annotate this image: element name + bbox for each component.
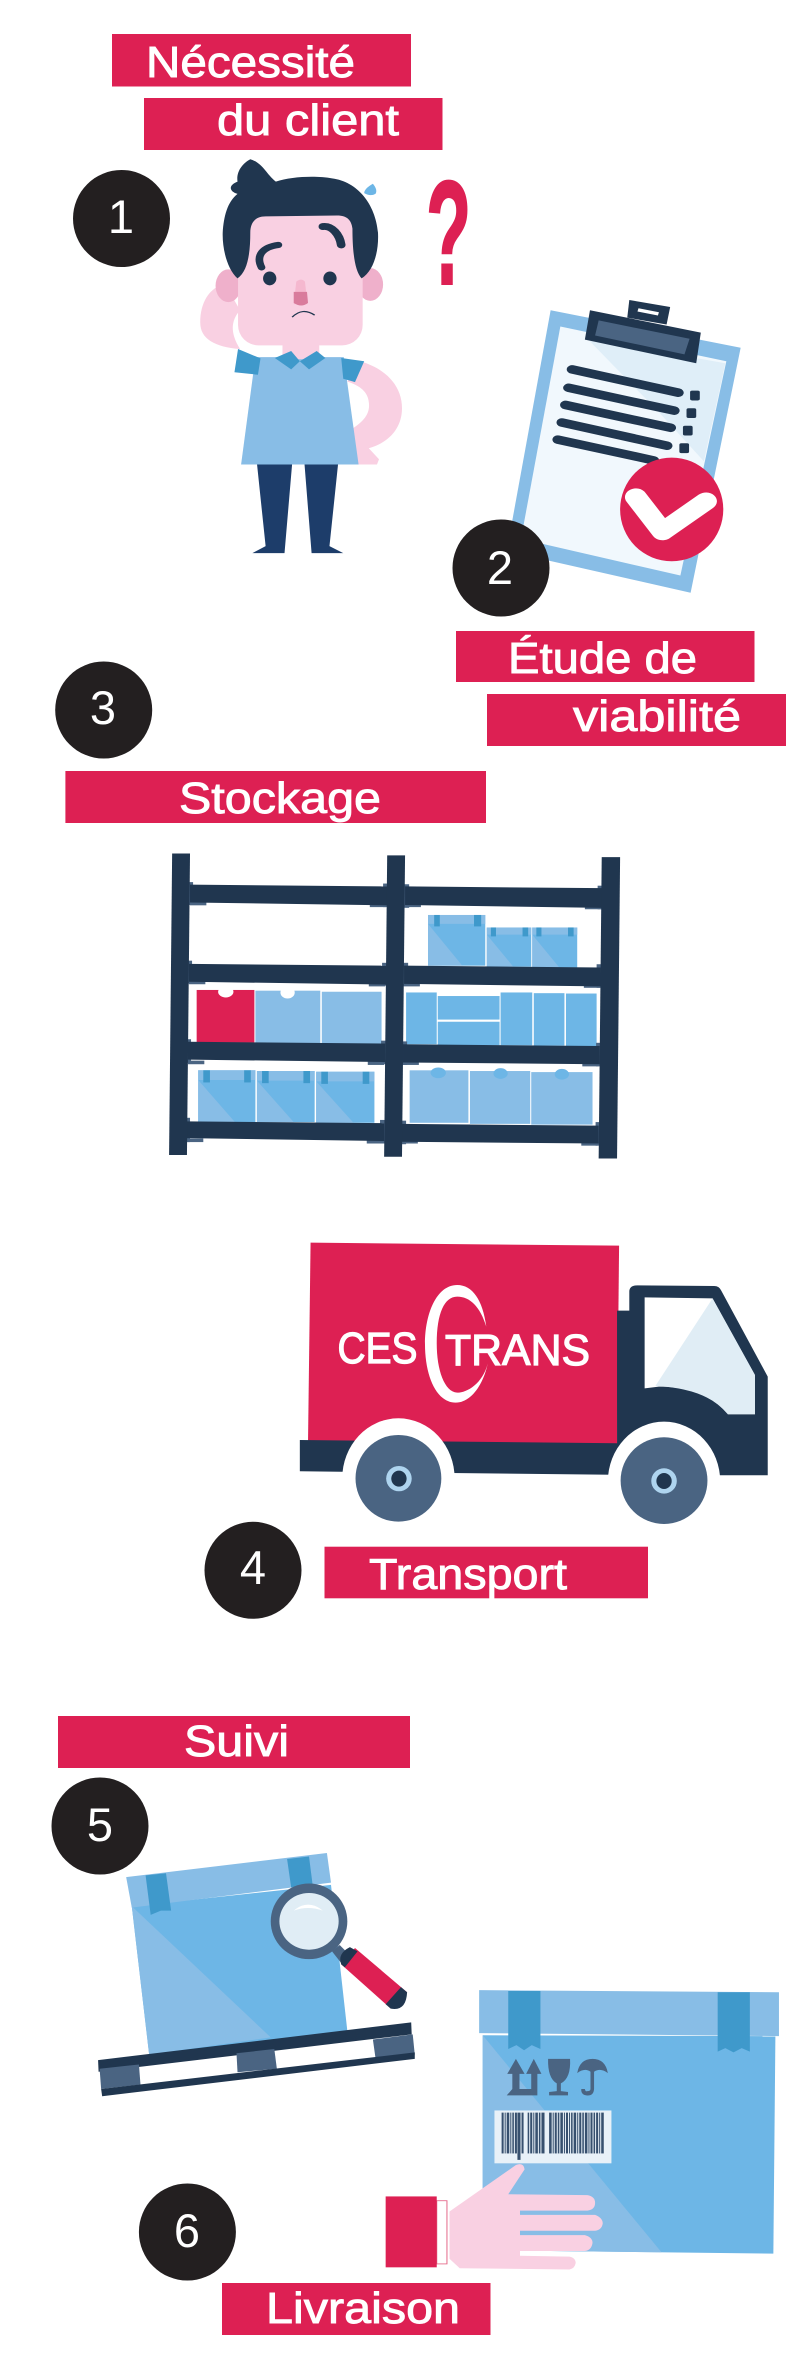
icon: delivery truck with logo: TRANS bbox=[445, 1326, 590, 1375]
icon: barcode label bbox=[494, 2110, 611, 2163]
number badge 6: 6 bbox=[174, 2204, 200, 2257]
heading: Stockage: Stockage bbox=[179, 774, 381, 823]
heading: Nécessité du client: Nécessité bbox=[146, 38, 355, 87]
panel: step 5 tracking bbox=[52, 1716, 415, 2096]
heading: Étude de viabilité: Étude de bbox=[508, 634, 697, 683]
panel: step 3 storage bbox=[55, 662, 620, 1159]
number badge 6 bbox=[139, 2184, 236, 2280]
heading: Nécessité du client: du client bbox=[217, 96, 399, 145]
heading: Livraison: Livraison bbox=[266, 2284, 460, 2333]
number badge 1: 1 bbox=[108, 190, 134, 243]
heading: Transport: Transport bbox=[369, 1550, 567, 1599]
number badge 5 bbox=[52, 1778, 148, 1874]
heading: Étude de viabilité bbox=[456, 631, 786, 746]
number badge 4 bbox=[204, 1522, 302, 1619]
heading: Étude de viabilité: viabilité bbox=[573, 692, 741, 741]
number badge 2 bbox=[452, 520, 550, 616]
icon: clipboard with check mark bbox=[507, 300, 741, 593]
panel: step 2 feasibility study bbox=[452, 300, 786, 746]
icon: puzzled man bbox=[200, 159, 402, 553]
panel: step 1 customer need bbox=[73, 34, 471, 553]
icon: warehouse shelves with boxes bbox=[169, 854, 620, 1159]
heading: Stockage bbox=[65, 771, 486, 823]
heading: Suivi bbox=[58, 1716, 410, 1768]
icon: delivery truck with logo bbox=[300, 1243, 768, 1542]
heading: Nécessité du client bbox=[112, 34, 442, 150]
heading: Livraison bbox=[222, 2283, 490, 2335]
panel: step 4 transport bbox=[204, 1243, 768, 1619]
icon: carton box held by a hand bbox=[386, 1990, 779, 2269]
number badge 2: 2 bbox=[487, 541, 513, 594]
number badge 1 bbox=[73, 170, 170, 267]
heading: Suivi: Suivi bbox=[184, 1717, 289, 1766]
heading: Transport bbox=[324, 1547, 648, 1599]
number badge 5: 5 bbox=[87, 1798, 113, 1851]
icon: question mark: ? bbox=[426, 150, 471, 316]
number badge 4: 4 bbox=[240, 1541, 266, 1594]
icon: box on pallet under magnifier bbox=[98, 1853, 415, 2096]
number badge 3: 3 bbox=[90, 681, 116, 734]
number badge 3 bbox=[55, 662, 152, 758]
icon: delivery truck with logo: CES bbox=[338, 1324, 418, 1373]
panel: step 6 delivery bbox=[139, 1990, 779, 2335]
